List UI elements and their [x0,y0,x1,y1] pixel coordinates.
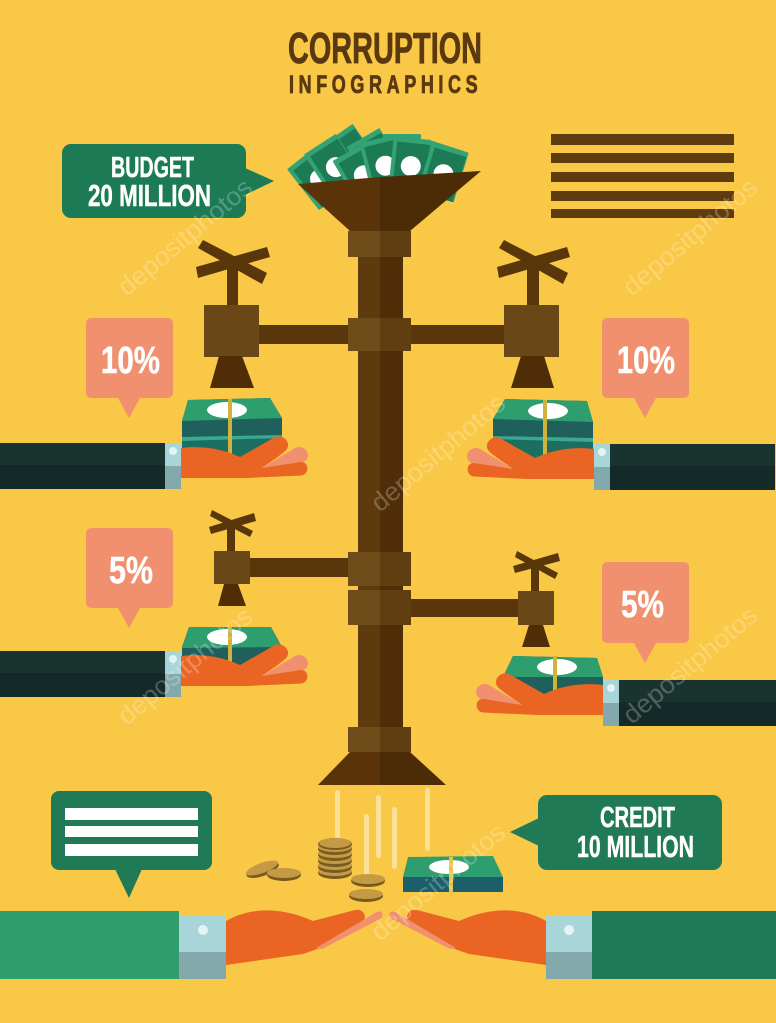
callout: 5% right: 5% [621,584,664,626]
hand with money: upper left [0,398,308,489]
callout: credit: CREDIT [600,802,675,834]
speech bubble: bottom left [51,791,212,898]
pipe collars [348,318,411,625]
callout: 10% right: 10% [617,340,675,382]
money in funnel [287,124,469,210]
pipe [358,250,403,730]
watermark: depositphotos [617,600,763,730]
title: INFOGRAPHICS [289,70,478,99]
money stack: bottom [403,856,503,893]
watermark: depositphotos [112,172,258,302]
callout: budget [62,144,274,218]
callout: credit [510,795,722,870]
watermark: depositphotos [365,388,511,518]
hand: bottom right [390,910,776,979]
hand with money: upper right [467,399,775,490]
watermark: depositphotos [365,817,511,947]
title: CORRUPTION [288,24,482,73]
callout: credit: 10 MILLION [577,829,694,864]
callout: 5% left [86,528,173,628]
callout: 10% left [86,318,173,418]
tap: lower right [411,551,560,647]
hand with money: lower left [0,627,308,697]
callout: 10% right [602,318,689,418]
callout: 5% left: 5% [109,550,153,592]
hand: bottom left [0,910,382,979]
watermark [112,172,763,947]
tap: upper right [411,240,570,388]
tap: lower left [209,510,348,606]
callout: budget: 20 MILLION [88,178,211,213]
text placeholder lines [551,134,734,218]
loose coins [244,857,385,902]
watermark: depositphotos [617,172,763,302]
hand with money: lower right [476,656,776,726]
callout: 10% left: 10% [101,340,160,382]
tap: upper left [196,240,348,388]
coin stack [318,838,352,879]
callout: budget: BUDGET [111,152,194,184]
title [288,24,482,99]
funnel [298,171,481,257]
callout: 5% right [602,562,689,663]
bottom outlet funnel [318,727,446,785]
watermark: depositphotos [112,601,258,731]
falling streaks [335,788,430,877]
